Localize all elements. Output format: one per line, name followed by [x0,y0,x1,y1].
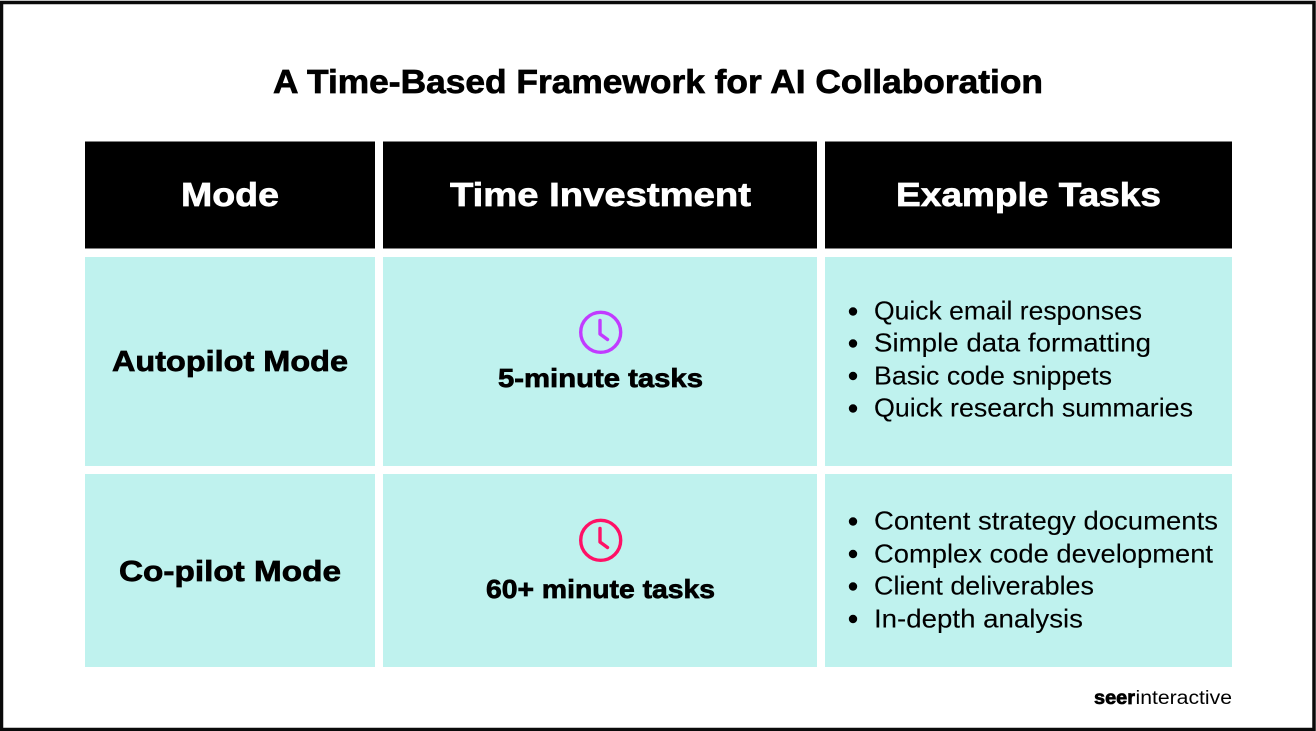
cell: Autopilot Mode label: Autopilot Mode [112,346,348,378]
bullet list: Co-pilot tasks: In-depth analysis [874,604,1083,634]
title: A Time-Based Framework for AI Collaboration [273,63,1043,100]
bullet list: Autopilot tasks: Basic code snippets [874,360,1112,390]
bullet list: Autopilot tasks: Quick research summaries [874,392,1193,422]
cell: 60+ minute time investment [383,474,817,667]
bullet list: Autopilot tasks: Quick email responses [874,296,1142,326]
logo: seerinteractive: seer [1094,688,1136,709]
bullet list: Co-pilot tasks: Complex code development [874,538,1214,568]
header cell: Example Tasks: Example Tasks [896,176,1161,213]
bullet list: Co-pilot tasks: Content strategy documents [874,506,1218,536]
label: 60+ minute tasks: 60+ minute tasks [486,574,715,604]
bullet list: Co-pilot tasks: Client deliverables [874,570,1094,600]
logo: seerinteractive: interactive [1136,688,1232,709]
label: 5-minute tasks: 5-minute tasks [498,363,703,393]
icon: purple clock [581,312,621,352]
header cell: Mode: Mode [181,176,279,213]
bullet list: Co-pilot tasks [849,506,1218,634]
cell: Autopilot Mode label [85,257,375,466]
table row: Co-pilot Mode [85,474,1232,667]
header cell: Mode [85,142,375,248]
cell: Co-pilot Mode label: Co-pilot Mode [119,556,341,588]
table row: Autopilot Mode [85,257,1232,466]
bullet list: Autopilot tasks [849,296,1193,422]
header cell: Time Investment: Time Investment [450,176,751,213]
table header row [85,142,1232,248]
bullet list: Autopilot tasks: Simple data formatting [874,328,1151,358]
cell: Autopilot example tasks [825,257,1232,466]
icon: pink clock [581,520,621,560]
cell: Co-pilot example tasks [825,474,1232,667]
header cell: Time Investment [383,142,817,248]
cell: 5-minute time investment [383,257,817,466]
cell: Co-pilot Mode label [85,474,375,667]
header cell: Example Tasks [825,142,1232,248]
logo: seerinteractive [1094,688,1232,709]
